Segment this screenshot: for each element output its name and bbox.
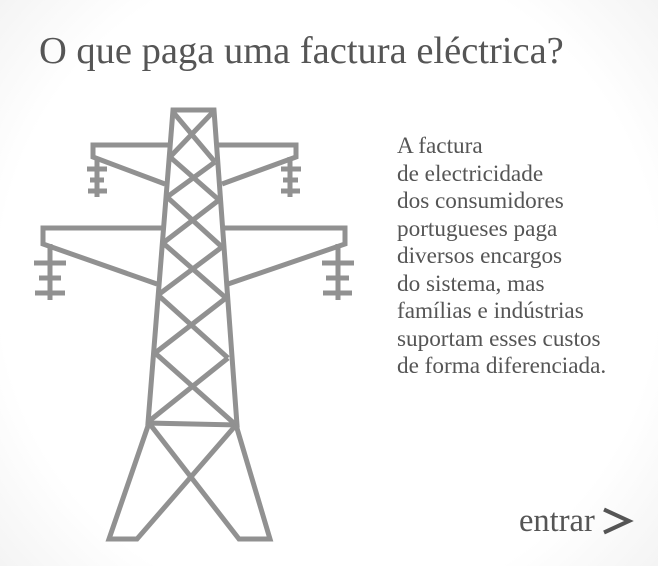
text block: introduction: famílias e indústrias	[397, 298, 584, 324]
text block: introduction	[397, 133, 606, 379]
text block: introduction: suportam esses custos	[397, 326, 601, 352]
text block: introduction: diversos encargos	[397, 243, 562, 269]
text block: introduction: dos consumidores	[397, 188, 564, 214]
text block: introduction: portugueses paga	[397, 216, 557, 242]
tower base legs	[109, 423, 270, 539]
text block: introduction: de electricidade	[397, 160, 543, 186]
title: O que paga uma factura eléctrica?	[39, 30, 564, 72]
text block: introduction: A factura	[397, 133, 483, 159]
lower left arm with insulator	[34, 228, 162, 300]
tower body with lattice	[148, 110, 237, 425]
enter label: entrar	[519, 502, 595, 538]
text block: introduction: do sistema, mas	[397, 270, 544, 296]
upper left arm with insulator	[87, 145, 168, 197]
lower right arm with insulator	[224, 228, 354, 300]
text block: introduction: de forma diferenciada.	[397, 353, 606, 379]
upper right arm with insulator	[218, 145, 301, 197]
